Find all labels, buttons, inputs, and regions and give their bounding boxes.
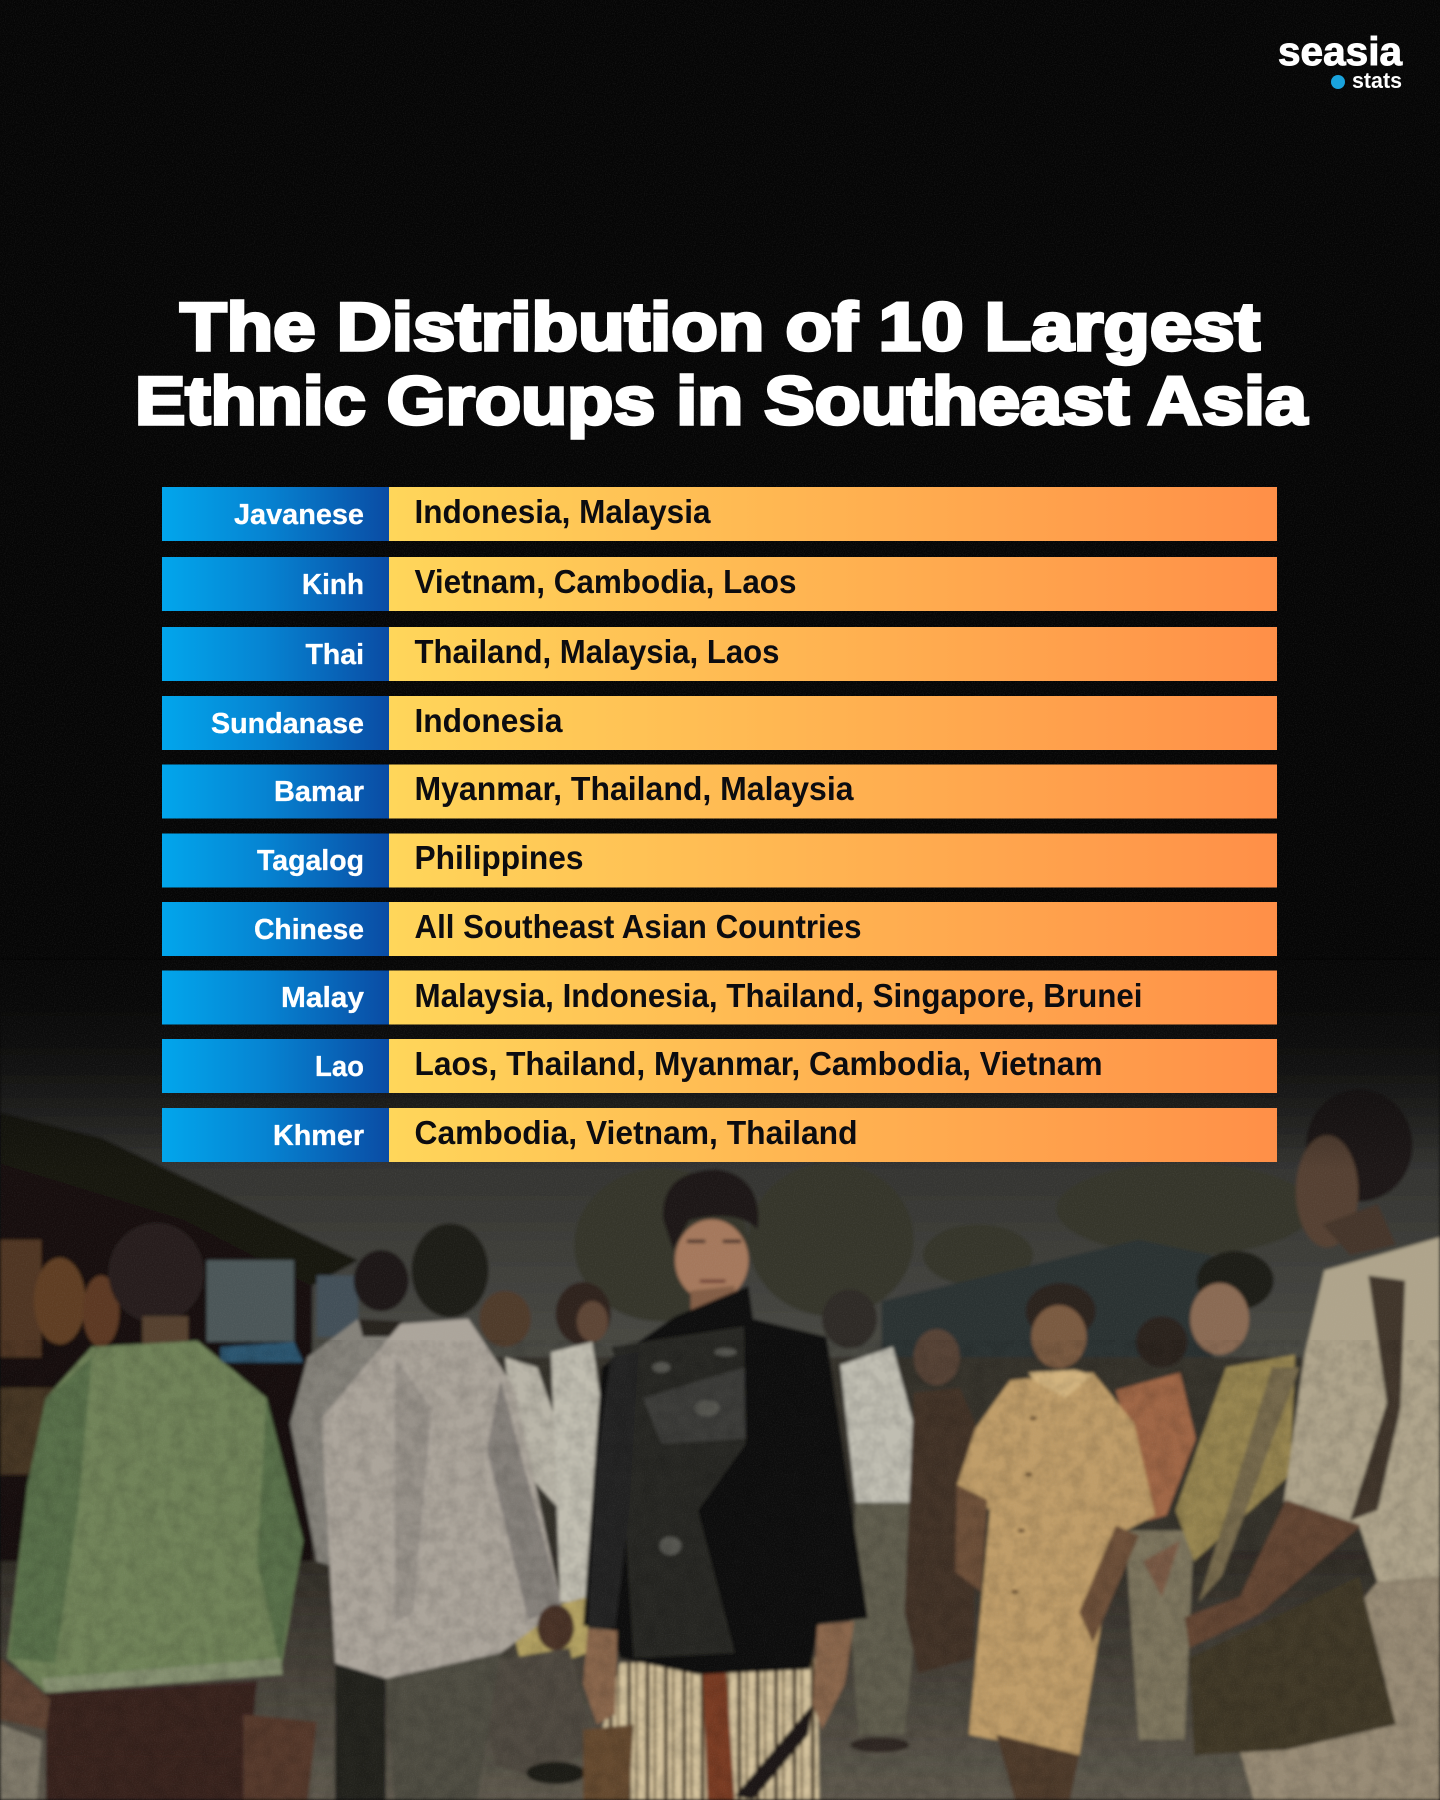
title — [135, 289, 1308, 439]
row: Chinese: All Southeast Asian Countries — [414, 908, 862, 945]
photo texture overlay — [0, 1340, 1440, 1800]
person: man in white shirt, back — [321, 1223, 574, 1800]
row: Javanese — [162, 487, 1277, 541]
person: woman in yellow floral blouse — [1143, 1251, 1295, 1597]
row: Chinese: Chinese — [254, 914, 364, 946]
logo: seasia stats — [1278, 30, 1403, 93]
row: Thai: Thai — [306, 639, 364, 671]
person: man with glasses and woman in white — [478, 1282, 611, 1784]
ground — [0, 1551, 1440, 1800]
row: Tagalog: Philippines — [414, 839, 584, 876]
midground wall — [276, 1357, 1440, 1561]
table of ethnic groups — [162, 487, 1277, 1162]
person: man grey shirt behind — [290, 1250, 409, 1587]
person: man with shoulder bag, right edge — [1185, 1089, 1440, 1800]
row: Thai: Thailand, Malaysia, Laos — [414, 633, 780, 670]
row: Bamar: Bamar — [274, 776, 364, 808]
person: woman in green blouse, back — [0, 1223, 317, 1800]
logo: seasia stats: stats — [1352, 68, 1402, 93]
row: Tagalog — [162, 834, 1277, 888]
person: woman in beige dress — [955, 1283, 1155, 1800]
left stall — [0, 1112, 358, 1561]
row: Sundanase — [162, 696, 1277, 750]
row: Malay: Malaysia, Indonesia, Thailand, Singapore, Brunei — [414, 977, 1142, 1014]
person: man in white shirt, right of centre — [822, 1289, 935, 1753]
row: Sundanase: Sundanase — [211, 708, 364, 740]
row: Chinese — [162, 902, 1277, 956]
row: Javanese: Javanese — [234, 499, 364, 531]
row: Khmer: Cambodia, Vietnam, Thailand — [414, 1114, 858, 1151]
row: Kinh: Kinh — [302, 569, 364, 601]
row: Khmer: Khmer — [273, 1120, 364, 1152]
trees — [574, 1163, 1313, 1321]
row: Malay: Malay — [281, 982, 364, 1014]
person: woman in floral dress — [905, 1329, 975, 1673]
title: The Distribution of 10 Largest — [180, 289, 1260, 365]
photo: market crowd scene — [0, 959, 1440, 1800]
row: Tagalog: Tagalog — [257, 845, 364, 877]
row: Thai — [162, 627, 1277, 681]
row: Kinh: Vietnam, Cambodia, Laos — [414, 563, 796, 600]
title: Ethnic Groups in Southeast Asia — [135, 363, 1308, 439]
row: Malay — [162, 970, 1277, 1024]
logo: seasia stats: seasia — [1278, 30, 1403, 74]
person: man in orange shirt — [1116, 1316, 1196, 1740]
fade from black into the photo — [0, 960, 1440, 1170]
row: Lao: Laos, Thailand, Myanmar, Cambodia, Vietnam — [414, 1045, 1102, 1082]
row: Kinh — [162, 557, 1277, 611]
row: Khmer — [162, 1108, 1277, 1162]
row: Bamar — [162, 764, 1277, 818]
row: Lao — [162, 1039, 1277, 1093]
row: Javanese: Indonesia, Malaysia — [414, 493, 711, 530]
row: Bamar: Myanmar, Thailand, Malaysia — [414, 770, 854, 807]
row: Sundanase: Indonesia — [414, 702, 563, 739]
person: central woman in black brocade — [583, 1169, 868, 1800]
right building — [882, 1240, 1212, 1357]
row: Lao: Lao — [315, 1051, 364, 1083]
